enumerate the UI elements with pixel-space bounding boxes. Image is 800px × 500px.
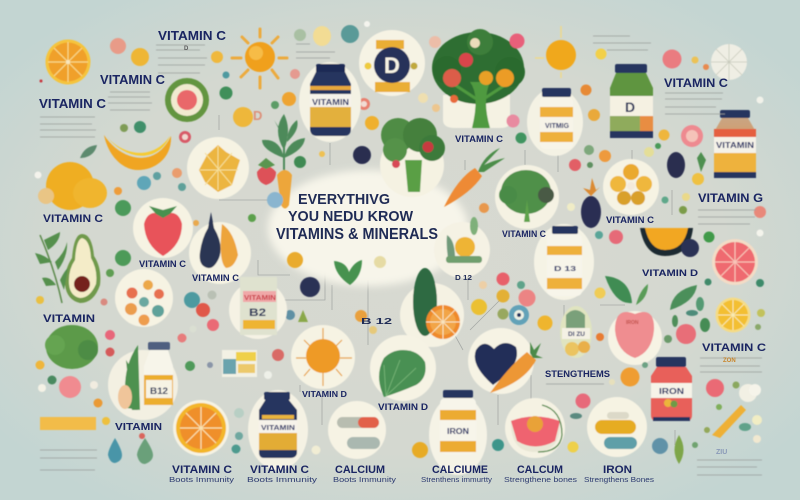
icon: vitamin D circle: D	[384, 53, 400, 78]
bottom labels: Strengthene bones	[504, 475, 577, 484]
icon: navy Vitamin bottle	[248, 390, 308, 470]
bottom labels: CALCUM	[517, 464, 563, 476]
text labels: VITAMIN C	[606, 215, 655, 225]
icon: small jar: DI ZU	[568, 332, 585, 338]
icon: watermelon circle	[505, 398, 565, 458]
title text: EVERYTHIVG	[298, 191, 390, 208]
decorative dots mid-right	[479, 203, 714, 244]
icon: green D bottle	[610, 64, 653, 138]
icon: small jar	[560, 306, 592, 358]
icon: apple circle: IRON	[626, 320, 639, 326]
icon: orange Vitamin bottle: VITAMIN	[716, 141, 754, 150]
icon: navy Vitamin bottle: VITAMIN	[261, 423, 295, 432]
icon: pink tablet, brush and right bits	[704, 379, 762, 443]
text labels: D 12	[455, 275, 472, 282]
bottom labels: Boots Immunity	[169, 475, 234, 484]
icon: capsules circle	[587, 397, 647, 457]
icon: sun top-right	[535, 26, 576, 78]
icon: apple circle	[605, 276, 662, 365]
icon: Iron supplement jar	[651, 357, 692, 421]
icon: leafy greens circle	[370, 335, 436, 401]
text labels: VITAMIN C	[158, 28, 227, 43]
icon: sun top-left	[232, 29, 287, 88]
bottom labels: VITAMIN C	[250, 464, 309, 476]
icon: capsule circle	[328, 401, 386, 459]
icon: sun in circle	[291, 325, 355, 389]
icon: green guava ring	[165, 78, 209, 122]
bottom labels: CALCIUME	[432, 464, 488, 476]
icon: water drops	[108, 408, 244, 464]
text labels: VITAMIN	[43, 313, 95, 325]
title text: YOU NEDU KROW	[288, 208, 414, 225]
icon: fruit tree	[432, 29, 525, 128]
icon: orange fruit	[34, 145, 107, 210]
text labels: VITAMIN C	[455, 134, 504, 144]
text labels: VITAMIN C	[43, 213, 103, 225]
title backdrop	[268, 170, 468, 286]
text labels: D	[184, 46, 189, 52]
icon: Iron bottle bottom	[429, 390, 487, 475]
bottom labels: Strengthens Bones	[584, 475, 654, 484]
icon: pink tablet and white citrus	[662, 44, 747, 80]
icon: pink slice and blackberry right	[662, 96, 766, 236]
icon: supplement bottle Vitamin top	[299, 62, 361, 142]
icon: dots near iron	[570, 362, 648, 419]
icon: vitamin D tablet: D	[253, 108, 262, 123]
icon: Iron bottle bottom: IRON	[447, 427, 469, 436]
icon: eggplant and squash circle	[189, 212, 251, 284]
icon: heart and carrot circle	[468, 328, 543, 394]
text labels: B 12	[361, 316, 392, 326]
icon: white Vitamin bottle	[527, 88, 583, 156]
yellow highlight bar	[40, 417, 96, 430]
decorative dots left	[36, 250, 377, 425]
icon: B12 bottle with leaves: B12	[150, 386, 168, 397]
text labels: VITAMIN C	[192, 273, 240, 283]
bottom labels: VITAMIN C	[172, 464, 232, 476]
text labels: VITAMIN D	[642, 268, 698, 279]
icon: Vitamin B12 bottle mid	[534, 224, 594, 300]
icon: blackberry top	[353, 146, 371, 164]
decorative nutrient dots centre	[471, 272, 606, 341]
icon: blackberry with orange leaves	[581, 178, 601, 228]
text labels: VITAMIN C	[139, 259, 187, 269]
icon: avocado	[65, 234, 100, 303]
text labels: VITAMIN G	[698, 191, 763, 205]
bottom labels: Boots Immunity	[247, 475, 317, 484]
icon: carrot plant	[262, 114, 305, 208]
text labels: VITAMIN D	[378, 402, 429, 412]
icon: vitamin D tablet	[233, 107, 262, 127]
text blocks small grey lines	[40, 36, 762, 475]
text labels: VITAMIN	[115, 422, 162, 433]
icon: vitamin B2 box: B2	[249, 307, 266, 319]
text labels: VITAMIN C	[502, 229, 546, 239]
icon: grapefruit	[712, 239, 758, 285]
icon: orange slice top-left	[46, 40, 90, 84]
text labels: VITAMIN C	[702, 342, 766, 354]
text labels: VITAMIN C	[39, 96, 107, 111]
icon: pink grapefruit slice	[59, 376, 81, 398]
connector lines	[219, 115, 675, 445]
title text: VITAMINS & MINERALS	[276, 226, 438, 243]
decorative dots top-centre	[418, 34, 670, 171]
text labels: VITAMIN D	[302, 390, 347, 399]
small decorative nutrients top-left	[40, 21, 379, 196]
icon: white Vitamin bottle: VITMIG	[545, 123, 570, 130]
icon: vitamin B2 box	[229, 277, 287, 339]
icon: orange Vitamin bottle	[714, 110, 756, 178]
small nutrient dots centre-left	[114, 151, 325, 226]
icon: banana	[104, 135, 171, 170]
bottom labels	[169, 464, 654, 484]
icon: blue ball and green leaf	[652, 435, 698, 464]
icon: orange wedge and plum	[640, 228, 699, 257]
text labels: VITAMIN C	[100, 73, 165, 87]
text labels: STENGTHEMS	[545, 369, 610, 379]
icon: B12 bottle with leaves	[108, 342, 178, 420]
icon: basil leaves	[334, 256, 386, 285]
icon: leafy lettuce	[45, 325, 98, 369]
icon: vitamin B2 box: VITAMIN	[244, 293, 276, 302]
icon: green D bottle: D	[625, 99, 635, 115]
icon: strawberry	[257, 158, 276, 185]
icon: herb sprig	[35, 232, 68, 303]
icon: supplement bottle Vitamin top: VITAMIN	[312, 98, 349, 107]
icon: vitamin D circle	[359, 30, 425, 96]
icon: zucchini and orange slice	[400, 268, 464, 347]
text labels	[39, 28, 766, 456]
text labels: ZON	[723, 358, 736, 364]
icon: orange slice circle	[173, 400, 229, 456]
bottom labels: CALCIUM	[335, 464, 385, 476]
icon: flower circle	[187, 137, 249, 199]
text labels: ZIU	[716, 449, 727, 456]
icon: carrot	[444, 148, 505, 207]
icon: leafy circle with yellow fruit	[434, 217, 490, 278]
bottom labels: Strenthens immurtty	[421, 475, 492, 484]
icon: broccoli tree left	[380, 118, 445, 197]
icon: candy circle	[115, 269, 173, 327]
icon: broccoli circle	[495, 165, 559, 229]
text labels: VITAMIN C	[664, 76, 728, 90]
icon: blackberry	[300, 277, 320, 297]
icon: Iron supplement jar: IRON	[659, 386, 684, 396]
icons: leaves and dots right	[664, 278, 765, 344]
title text	[276, 191, 438, 243]
icon: citrus slice right	[716, 298, 750, 332]
icon: chart tile	[222, 350, 257, 377]
bottom labels: Boots Immunity	[333, 475, 396, 484]
bottom labels: IRON	[603, 464, 632, 476]
icon: yellow flower circle	[603, 159, 659, 215]
icon: apple circle left	[133, 198, 193, 258]
decorative dots bottom centre	[232, 439, 578, 458]
icon: Vitamin B12 bottle mid: D 13	[554, 266, 576, 273]
